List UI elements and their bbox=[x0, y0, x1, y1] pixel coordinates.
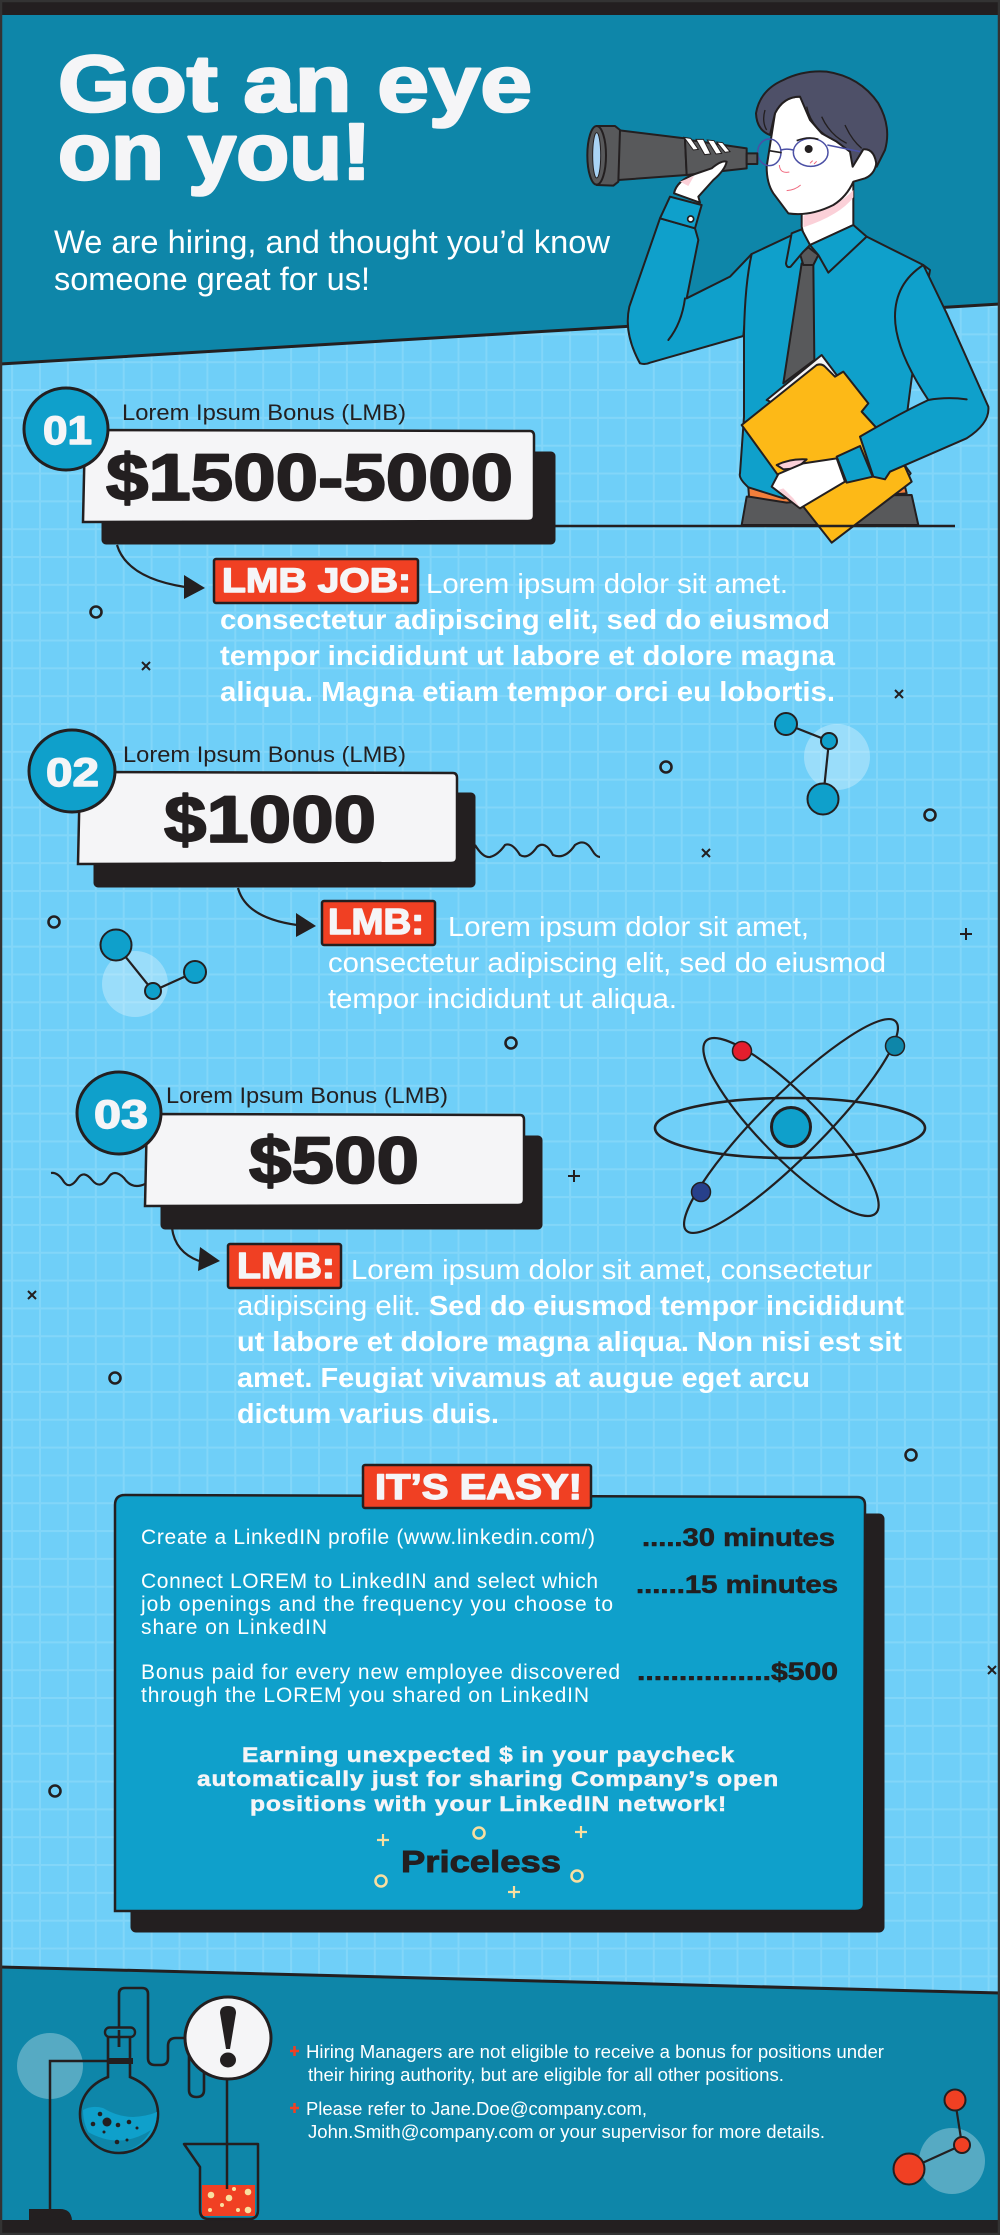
price box 01: $1500-5000 bbox=[106, 440, 513, 514]
description 02 bbox=[328, 911, 886, 1014]
label 03: Lorem Ipsum Bonus (LMB) bbox=[166, 1083, 448, 1108]
note 2: John.Smith@company.com or your supervisor for more details. bbox=[308, 2121, 825, 2142]
bonus 01 section bbox=[24, 388, 836, 707]
closing statement: Earning unexpected $ in your paycheck bbox=[242, 1744, 735, 1767]
footer band bbox=[0, 1967, 1000, 2235]
arrow 01 bbox=[117, 545, 205, 599]
description 01: tempor incididunt ut labore et dolore magna bbox=[220, 640, 836, 671]
description 03: Sed do eiusmod tempor incididunt bbox=[429, 1290, 904, 1321]
tag: it's easy: IT’S EASY! bbox=[375, 1468, 582, 1507]
tag LMB 03: LMB: bbox=[237, 1245, 335, 1286]
number badge 03 bbox=[77, 1072, 161, 1154]
closing statement bbox=[197, 1744, 779, 1816]
description 03: dictum varius duis. bbox=[237, 1398, 499, 1429]
step 2: ......15 minutes bbox=[636, 1571, 838, 1599]
illustration: man with spyglass and folder bbox=[587, 71, 988, 543]
label 02: Lorem Ipsum Bonus (LMB) bbox=[123, 742, 406, 767]
label 01: Lorem Ipsum Bonus (LMB) bbox=[122, 400, 406, 425]
description 03: ut labore et dolore magna aliqua. Non nisi est sit bbox=[237, 1326, 902, 1357]
description 03: Lorem ipsum dolor sit amet, consectetur bbox=[351, 1254, 872, 1285]
number badge 01 bbox=[24, 388, 108, 470]
step 1: Create a LinkedIN profile (www.linkedin.com/) bbox=[141, 1526, 595, 1549]
step 3: Bonus paid for every new employee discovered bbox=[141, 1661, 620, 1684]
priceless: Priceless bbox=[401, 1844, 561, 1879]
description 03: amet. Feugiat vivamus at augue eget arcu bbox=[237, 1362, 810, 1393]
sparkles around priceless bbox=[376, 1826, 587, 1898]
squiggle 03 bbox=[51, 1173, 145, 1186]
price box 03: $500 bbox=[249, 1123, 419, 1197]
price box 01 bbox=[83, 430, 555, 544]
step 3: ................$500 bbox=[637, 1658, 838, 1686]
description 01: consectetur adipiscing elit, sed do eiusmod bbox=[220, 604, 830, 635]
icon: molecule bottom right bbox=[894, 2090, 985, 2194]
note 1: Hiring Managers are not eligible to receive a bonus for positions under bbox=[306, 2041, 884, 2062]
icon: exclamation badge bbox=[185, 1997, 271, 2079]
step 1 bbox=[141, 1524, 835, 1552]
description 01 bbox=[220, 568, 836, 707]
header band bbox=[0, 0, 1000, 364]
step 3 bbox=[141, 1658, 838, 1707]
subtitle: someone great for us! bbox=[54, 261, 370, 297]
note 2: Please refer to Jane.Doe@company.com, bbox=[306, 2098, 647, 2119]
title: Got an eye bbox=[58, 39, 532, 128]
panel: it's easy bbox=[115, 1465, 884, 1932]
step 2 bbox=[140, 1570, 838, 1639]
icon: lab equipment bbox=[17, 1988, 258, 2220]
bonus 02 section bbox=[29, 730, 886, 1014]
description 03: adipiscing elit. bbox=[237, 1290, 421, 1321]
note 2 bbox=[290, 2098, 825, 2142]
icon: molecule top right bbox=[775, 713, 870, 814]
number badge 03: 03 bbox=[94, 1093, 148, 1137]
tag LMB JOB: LMB JOB: bbox=[222, 562, 411, 600]
bonus 03 section bbox=[51, 1072, 904, 1429]
note 1 bbox=[290, 2041, 884, 2085]
footer notes bbox=[290, 2041, 884, 2142]
decorative rings and marks bbox=[28, 606, 996, 1796]
squiggle 02 bbox=[475, 842, 600, 857]
title: on you! bbox=[58, 107, 371, 196]
description 01: Lorem ipsum dolor sit amet. bbox=[426, 568, 788, 599]
description 02: tempor incididunt ut aliqua. bbox=[328, 983, 677, 1014]
number badge 01: 01 bbox=[43, 409, 92, 453]
icon: atom bbox=[655, 999, 925, 1253]
step 2: Connect LOREM to LinkedIN and select which bbox=[141, 1570, 598, 1593]
arrow 03 bbox=[172, 1228, 220, 1271]
price box 03 bbox=[145, 1114, 542, 1229]
closing statement: positions with your LinkedIN network! bbox=[250, 1793, 727, 1816]
arrow 02 bbox=[238, 888, 316, 937]
subtitle: We are hiring, and thought you’d know bbox=[54, 224, 611, 260]
description 02: consectetur adipiscing elit, sed do eiusmod bbox=[328, 947, 886, 978]
subtitle bbox=[54, 224, 611, 297]
title bbox=[58, 39, 532, 196]
step 2: job openings and the frequency you choose to bbox=[140, 1593, 613, 1616]
description 03 bbox=[237, 1254, 904, 1429]
note 1: their hiring authority, but are eligible for all other positions. bbox=[308, 2064, 784, 2085]
number badge 02 bbox=[29, 730, 115, 812]
tag LMB 02: LMB: bbox=[328, 901, 424, 942]
step 2: share on LinkedIN bbox=[141, 1616, 327, 1639]
price box 02: $1000 bbox=[164, 782, 376, 856]
description 02: Lorem ipsum dolor sit amet, bbox=[448, 911, 809, 942]
price box 02 bbox=[78, 772, 475, 887]
description 01: aliqua. Magna etiam tempor orci eu lobortis. bbox=[220, 676, 835, 707]
ground line under man bbox=[555, 525, 955, 527]
step 3: through the LOREM you shared on LinkedIN bbox=[141, 1684, 589, 1707]
icon: molecule left bbox=[100, 930, 206, 1017]
number badge 02: 02 bbox=[46, 751, 99, 795]
step 1: .....30 minutes bbox=[642, 1524, 835, 1552]
closing statement: automatically just for sharing Company’s open bbox=[197, 1768, 779, 1791]
